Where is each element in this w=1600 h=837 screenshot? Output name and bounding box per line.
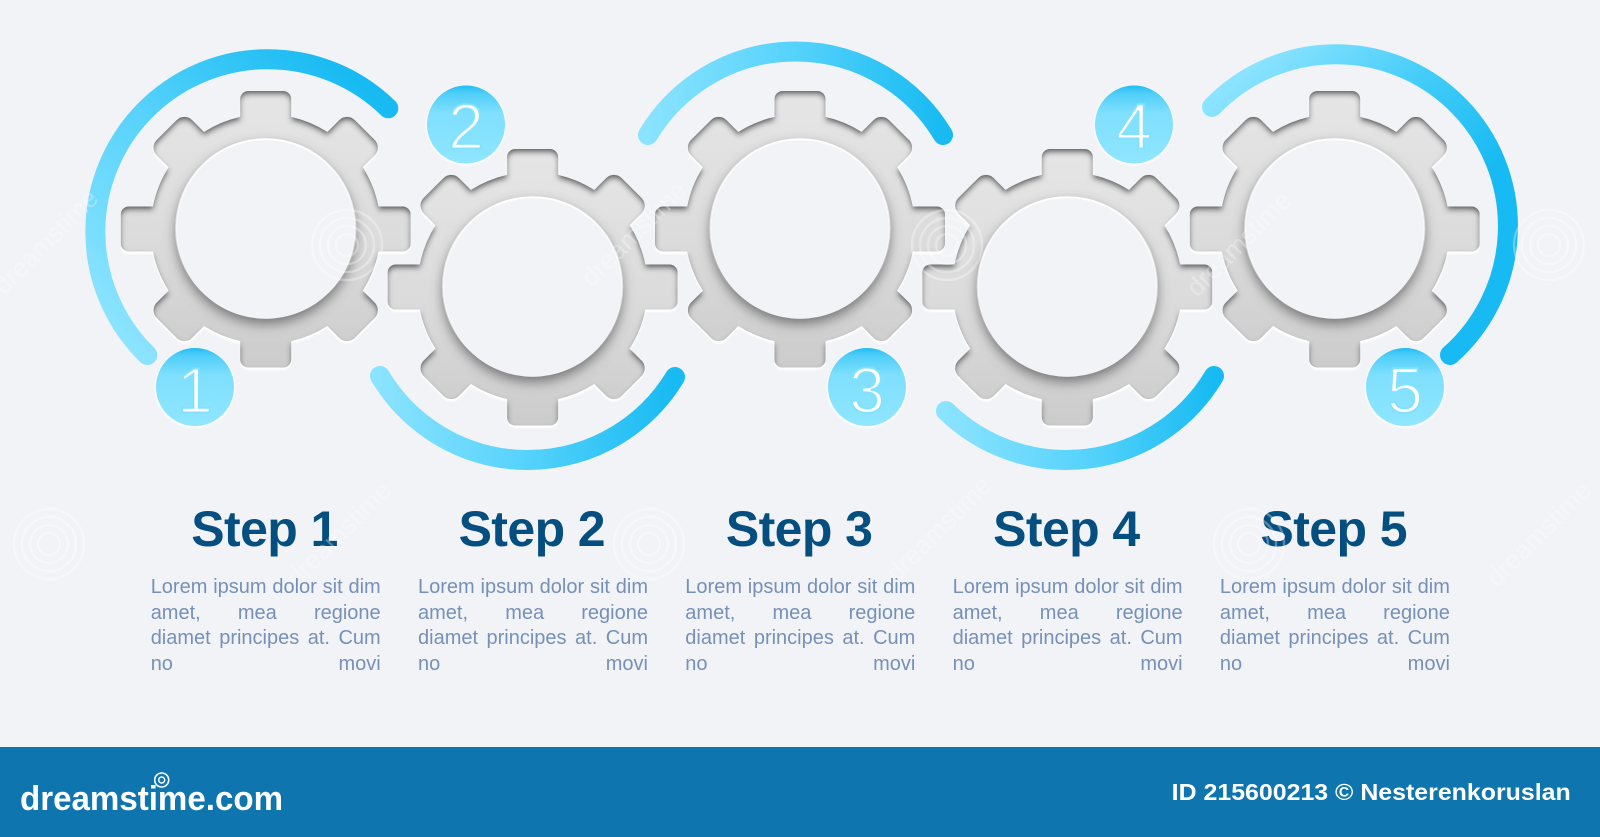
body text: step 5: no movi: [1220, 653, 1450, 675]
gear: step 5: [1185, 79, 1485, 379]
body text: step 1: Lorem ipsum dolor sit dim: [151, 576, 381, 598]
number badge 1: 1: [177, 354, 213, 426]
body text: step 2: diamet principes at. Cum: [418, 627, 648, 649]
watermark overlay: dreamstime: [880, 470, 997, 587]
arc: step 1: [95, 59, 388, 355]
body text: step 3: diamet principes at. Cum: [685, 627, 915, 649]
heading: step 5: Step 5: [1260, 501, 1407, 557]
body text: step 2: [418, 576, 648, 675]
number badge 5: [1364, 348, 1446, 428]
gear: step 3: [650, 79, 950, 379]
arc: step 2: [380, 376, 675, 460]
arc: step 3: [648, 51, 943, 135]
heading: step 2: Step 2: [459, 501, 605, 557]
body text: step 5: diamet principes at. Cum: [1220, 627, 1450, 649]
footer credit: ID 215600213 © Nesterenkoruslan: [1172, 779, 1571, 805]
body text: step 4: no movi: [953, 653, 1183, 675]
body text: step 5: amet, mea regione: [1220, 602, 1450, 624]
body text: step 2: Lorem ipsum dolor sit dim: [418, 576, 648, 598]
arc: step 5: [1212, 54, 1508, 355]
gear: step 4: [917, 137, 1217, 437]
arc: step 4: [946, 376, 1214, 460]
watermark overlay: dreamstime: [1180, 185, 1297, 302]
body text: step 4: [953, 576, 1183, 675]
body text: step 3: [685, 576, 915, 675]
body text: step 5: [1220, 576, 1450, 675]
footer band: [0, 747, 1600, 837]
number badge 2: [426, 85, 506, 166]
number badge 5: 5: [1387, 354, 1423, 426]
body text: step 3: amet, mea regione: [685, 602, 915, 624]
watermark overlay: dreamstime: [1480, 475, 1597, 592]
body text: step 1: diamet principes at. Cum: [151, 627, 381, 649]
watermark overlay: [0, 175, 1597, 592]
body text: step 4: Lorem ipsum dolor sit dim: [953, 576, 1183, 598]
heading: step 3: Step 3: [726, 501, 872, 557]
heading: step 1: Step 1: [191, 501, 338, 557]
number badge 4: 4: [1116, 90, 1152, 162]
body text: step 4: amet, mea regione: [953, 602, 1183, 624]
number badge 3: [826, 348, 908, 428]
footer logo: dreamstime.com: dreamstime.com: [20, 780, 283, 818]
number badge 3: 3: [849, 354, 885, 426]
heading: step 4: Step 4: [993, 501, 1140, 557]
number badge 4: [1094, 85, 1174, 166]
body text: step 1: [151, 576, 381, 675]
watermark overlay: dreamstime: [575, 175, 692, 292]
body text: step 5: Lorem ipsum dolor sit dim: [1220, 576, 1450, 598]
watermark overlay: dreamstime: [280, 475, 397, 592]
body text: step 1: amet, mea regione: [151, 602, 381, 624]
body text: step 2: amet, mea regione: [418, 602, 648, 624]
body text: step 2: no movi: [418, 653, 648, 675]
body text: step 1: no movi: [151, 653, 381, 675]
body text: step 3: no movi: [685, 653, 915, 675]
gear: step 2: [383, 137, 683, 437]
body text: step 4: diamet principes at. Cum: [953, 627, 1183, 649]
gear: step 1: [116, 79, 416, 379]
body text: step 3: Lorem ipsum dolor sit dim: [685, 576, 915, 598]
number badge 2: 2: [448, 90, 484, 162]
number badge 1: [154, 348, 236, 428]
